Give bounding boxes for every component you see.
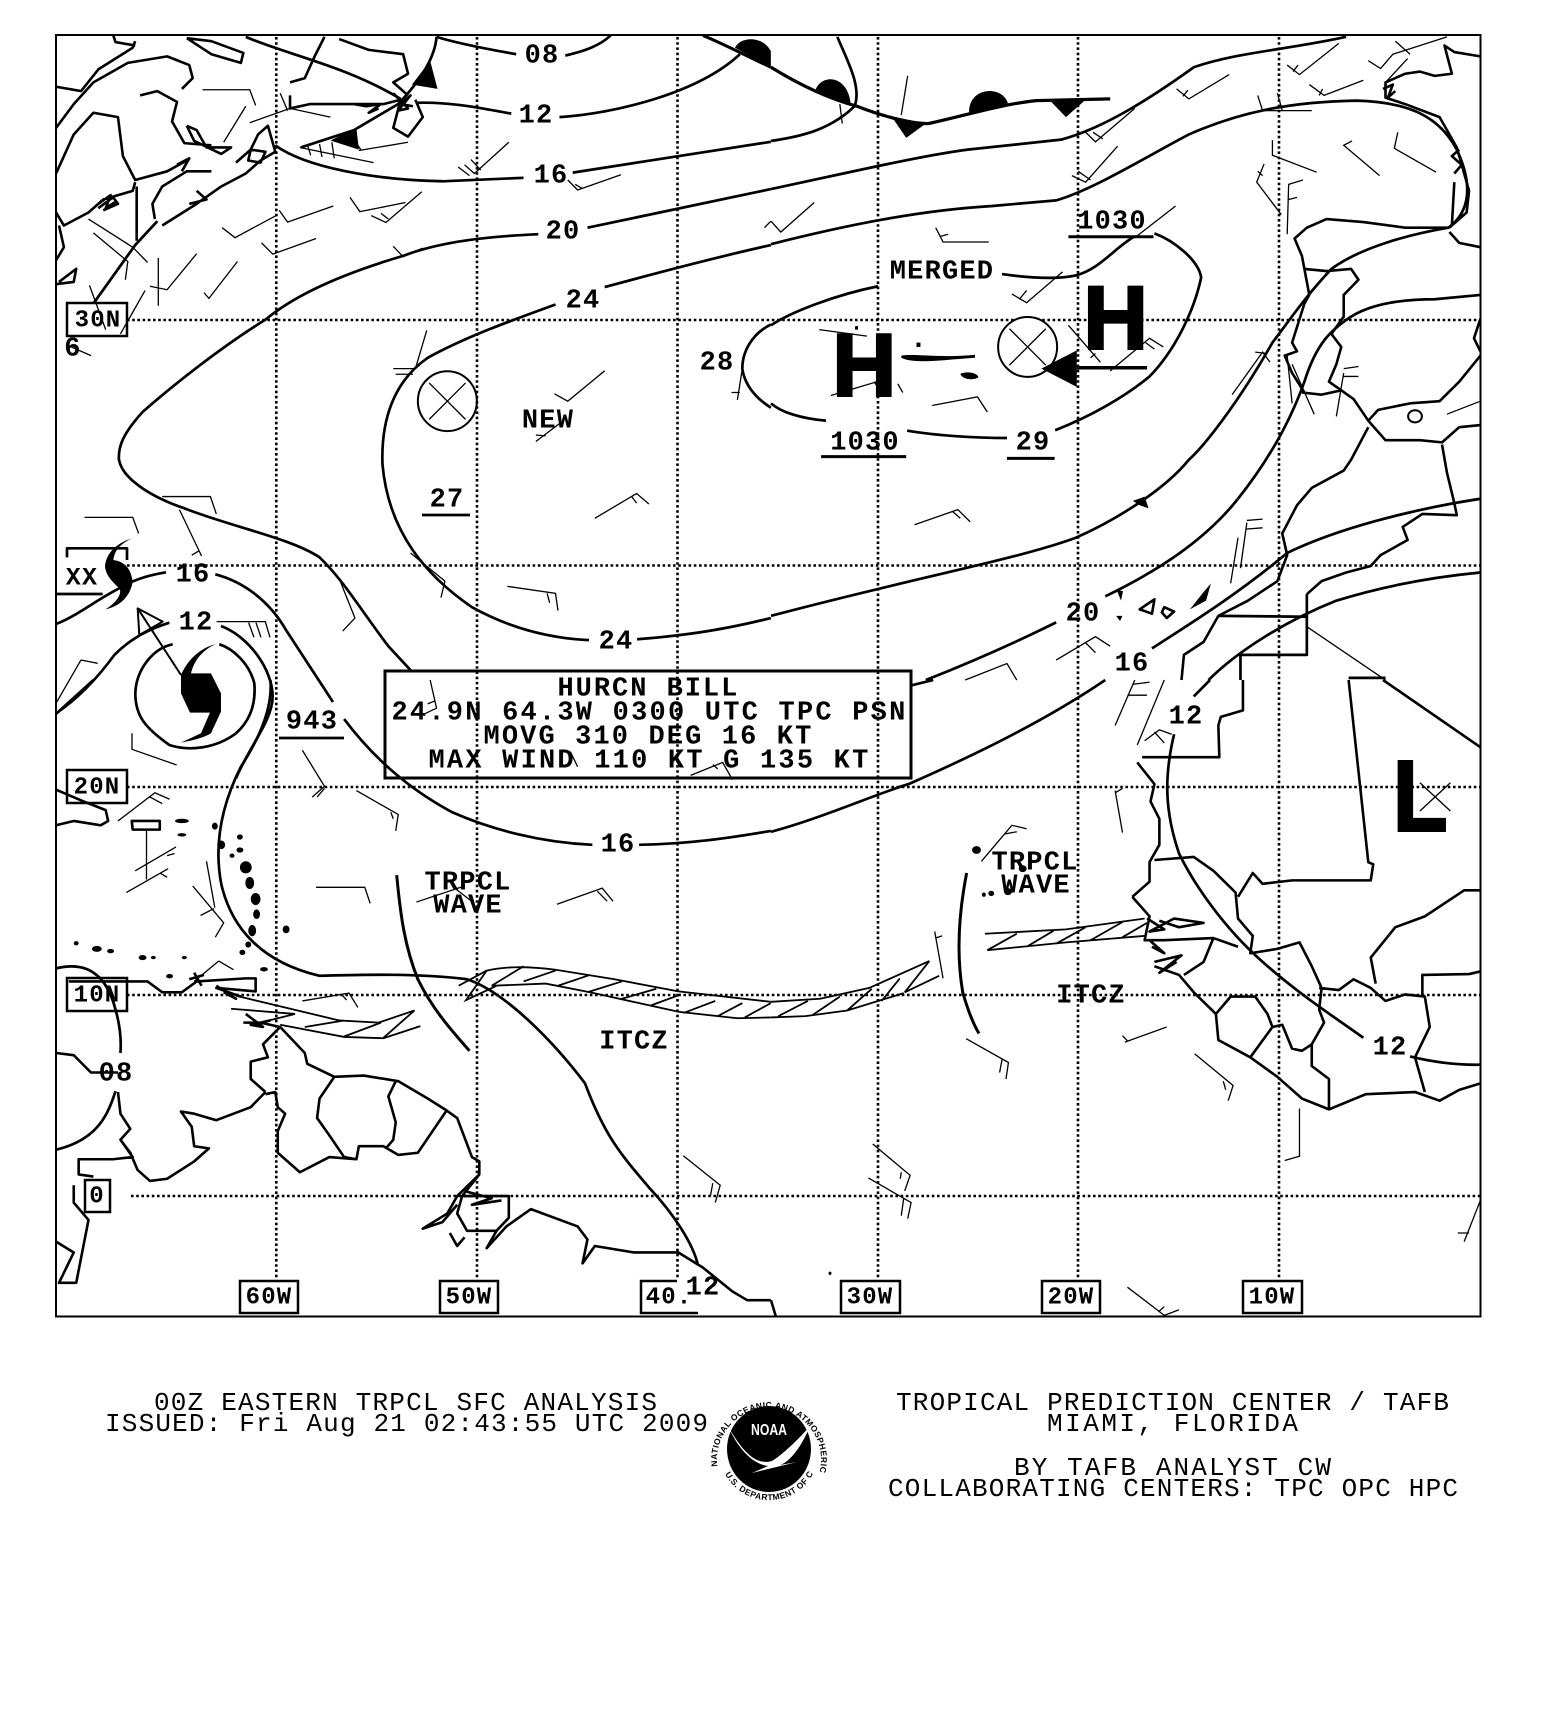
callout: Hurricane Bill advisory: [385, 671, 911, 778]
map frame: [56, 35, 1480, 1316]
label box: 50W: 50W: [446, 1284, 492, 1312]
ITCZ band: east of central segment: [771, 961, 939, 1017]
tropical wave label: west: WAVE: [433, 892, 503, 922]
low pressure centre cross: [1420, 783, 1450, 811]
labels: NEW and MERGED: NEW: [522, 406, 574, 436]
wind barbs: [56, 622, 270, 765]
cold front near Newfoundland: [93, 37, 437, 304]
caption: issuing centre: BY TAFB ANALYST CW: [1014, 1453, 1331, 1483]
high pressure letter: west: H: [832, 316, 896, 414]
central pressure: 1030 north: 1030: [1077, 208, 1147, 238]
label box: 10W: [1243, 1281, 1302, 1313]
hurricane symbol: forecast position: [105, 538, 133, 609]
isobars: [119, 36, 771, 670]
caption: issuing centre: TROPICAL PREDICTION CENTER / TAFB: [896, 1388, 1449, 1418]
tropical wave label: east: WAVE: [1001, 872, 1071, 902]
high pressure centre marker: new: [418, 371, 477, 431]
label box: equator: [85, 1180, 110, 1212]
label box: 10W: 10W: [1249, 1284, 1295, 1312]
hurricane Bill symbols and isobars: [56, 538, 333, 778]
isobar label underlines: [821, 237, 1153, 458]
wind barbs: [771, 37, 1480, 680]
caption: issuing centre: COLLABORATING CENTERS: TPC OPC HPC: [888, 1474, 1458, 1504]
ITCZ band: central segment: [459, 966, 771, 1018]
isobar value labels: 20: [546, 218, 580, 248]
isobar value labels: 16: [534, 162, 568, 192]
labels: NEW and MERGED: [522, 258, 994, 436]
isobar value labels: 12: [1373, 1034, 1407, 1064]
label box: 20W: [1042, 1281, 1100, 1313]
coastlines: Europe and North Africa: [1181, 46, 1480, 680]
logo: NOAA seal: U.S. DEPARTMENT OF COMMERCE: [726, 1471, 812, 1500]
isobar value labels: 08: [99, 1060, 133, 1090]
label box: 30W: [841, 1281, 900, 1313]
isobar value labels: [64, 42, 1407, 1304]
isobar value labels: 16: [176, 560, 210, 590]
labels: NEW and MERGED: MERGED: [890, 258, 994, 288]
callout: Hurricane Bill advisory: HURCN BILL: [558, 674, 738, 704]
logo: NOAA seal: NATIONAL OCEANIC AND ATMOSPHERIC ADMINISTRATION: [711, 1402, 827, 1473]
isobar value labels: 20: [1066, 600, 1100, 630]
coastlines: West Africa: [771, 680, 1480, 1317]
motion arrow: high pressure: [1041, 350, 1147, 387]
isobar value labels: 16: [601, 830, 635, 860]
label box: 30W: 30W: [847, 1284, 893, 1312]
label box: 60W: 60W: [246, 1284, 292, 1312]
isobar value labels: 12: [519, 102, 553, 132]
southeast quadrant features: [771, 680, 1480, 1317]
caption: chart title and issue time: ISSUED: Fri Aug 21 02:43:55 UTC 2009: [105, 1409, 708, 1439]
isobar value labels: 6: [64, 334, 82, 364]
isobars around hurricane: [56, 572, 333, 778]
Canary island outlines: [1140, 599, 1174, 618]
ITCZ label: west: ITCZ: [599, 1028, 669, 1058]
isobars: [771, 680, 1480, 1065]
callout: Hurricane Bill advisory: MOVG 310 DEG 16 KT: [484, 722, 812, 752]
ITCZ label: east: ITCZ: [1056, 982, 1126, 1012]
caption: issuing centre: MIAMI, FLORIDA: [1047, 1409, 1298, 1439]
tropical wave label: west: [424, 868, 512, 922]
central pressure: 1030 south: 1030: [830, 428, 900, 458]
coastlines: Canada and US east coast: [56, 35, 423, 284]
latitude and longitude grid: [127, 37, 1480, 1279]
logo: NOAA seal: NOAA: [751, 1422, 787, 1439]
isobar value labels: 28: [700, 348, 734, 378]
wind barbs: [66, 90, 771, 631]
label box: 20N: [67, 770, 127, 803]
northwest quadrant features: [56, 35, 771, 670]
map panel: surface analysis chart: [56, 35, 1480, 1317]
central pressure: 943: 943: [286, 708, 338, 738]
label box: 50W: [440, 1281, 498, 1313]
Balearic outline: [1408, 410, 1422, 422]
hurricane symbol: Bill: [181, 644, 221, 743]
isobar value labels: 08: [525, 42, 559, 72]
low pressure letter: L: [1393, 741, 1447, 853]
position box stub: [56, 548, 127, 594]
high pressure centre marker: merged: [998, 317, 1057, 377]
label box: 60W: [240, 1281, 298, 1313]
southwest quadrant features: [56, 680, 771, 1300]
isobar value labels: 16: [1115, 650, 1149, 680]
stationary front line: [771, 67, 1110, 124]
isobar value labels: 24: [566, 286, 600, 316]
isobar value labels: 12: [1169, 702, 1203, 732]
border lines in western Sahara: [1218, 594, 1386, 680]
label box: 20N: 20N: [74, 774, 120, 802]
front symbols: [815, 79, 1086, 138]
ITCZ band: west segment: [231, 996, 420, 1038]
label box: 10N: [67, 978, 127, 1011]
caption: chart title and issue time: [105, 1388, 708, 1439]
isobar value labels: 24: [599, 628, 633, 658]
caption: issuing centre: [888, 1388, 1458, 1504]
label box: equator: 0: [89, 1184, 105, 1210]
coastlines: Caribbean and South America: [56, 790, 771, 1300]
isobars: [56, 680, 771, 1265]
wind barbs: [118, 680, 732, 1203]
ITCZ band: near Africa: [985, 919, 1147, 950]
label box: 40W partly hidden: [641, 1281, 698, 1313]
northeast quadrant features: [771, 37, 1480, 680]
central pressure: 1029: 29: [1016, 428, 1050, 458]
motion arrow: hurricane: [138, 608, 181, 675]
Cape Verde islands: [829, 846, 1027, 1275]
tropical wave label: east: TRPCL: [991, 848, 1079, 878]
warm front bump: [735, 39, 771, 67]
isobar value labels: 12: [686, 1274, 720, 1304]
isobar value labels: 12: [179, 608, 213, 638]
Lesser Antilles islands: [74, 819, 290, 978]
front at top of map: [703, 36, 771, 67]
central pressure: 1027: 27: [430, 486, 464, 516]
tropical wave label: west: TRPCL: [424, 868, 512, 898]
label box: 40W partly hidden: 40.: [646, 1284, 692, 1312]
label box: 10N: 10N: [74, 982, 120, 1010]
caption: chart title and issue time: 00Z EASTERN TRPCL SFC ANALYSIS: [154, 1388, 657, 1418]
logo: NOAA seal: [711, 1402, 827, 1500]
label box: 30N: [67, 303, 127, 336]
high pressure letter: east: H: [1084, 268, 1148, 368]
front triangles: [330, 61, 438, 150]
label box: 20W: 20W: [1048, 1284, 1094, 1312]
tropical wave axis: east: [959, 873, 979, 1033]
callout: Hurricane Bill advisory: MAX WIND 110 KT G 135 KT: [428, 746, 870, 776]
callout: Hurricane Bill advisory: 24.9N 64.3W 0300 UTC TPC PSN: [392, 698, 906, 728]
tropical wave label: east: [991, 848, 1079, 902]
wind barbs: [868, 680, 1480, 1315]
label: 25N partly hidden: XX: [66, 564, 98, 592]
label box: 30N: 30N: [75, 308, 121, 334]
tropical wave axis: west: [397, 875, 469, 1051]
islands: Azores, Madeira, Canaries, Mallorca: [855, 326, 1211, 621]
isobars: [771, 37, 1480, 680]
